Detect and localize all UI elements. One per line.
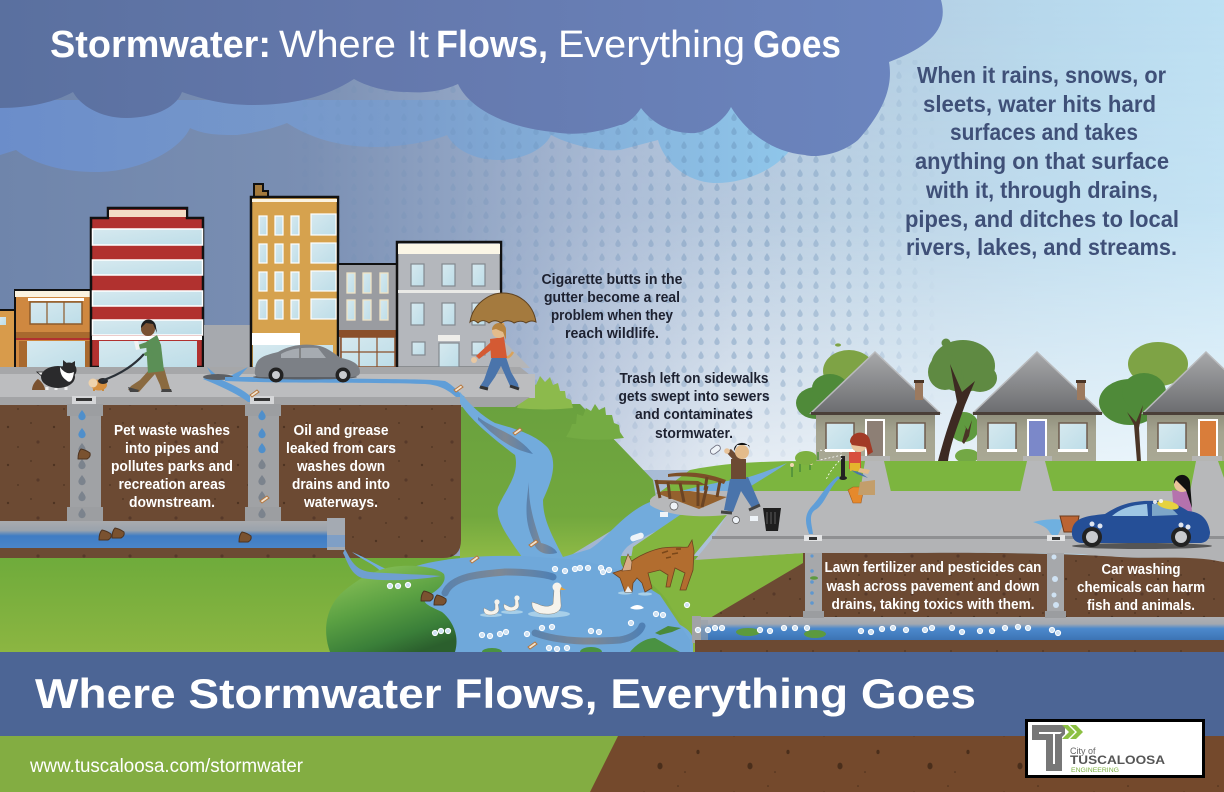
title: Where It bbox=[279, 24, 429, 66]
title: Everything bbox=[558, 24, 745, 66]
text: pet waste bbox=[111, 423, 233, 511]
logo: City of bbox=[1070, 746, 1096, 756]
text: car washing bbox=[1077, 562, 1205, 614]
intro paragraph bbox=[905, 62, 1179, 260]
oil slicks bbox=[445, 417, 642, 641]
title: Flows, bbox=[436, 24, 548, 66]
runoff from car bbox=[1033, 519, 1065, 538]
runoff from lawn bbox=[806, 476, 840, 534]
icon: person with umbrella bbox=[470, 293, 536, 390]
intro paragraph: with it, through drains, bbox=[925, 177, 1158, 203]
logo: ENGINEERING bbox=[1071, 767, 1119, 774]
intro paragraph: anything on that surface bbox=[915, 148, 1169, 174]
icon: trash can bbox=[763, 508, 781, 531]
bubbles bbox=[387, 565, 1061, 652]
vertical pipe 2 bbox=[245, 396, 281, 534]
soil strip below pipe right bbox=[695, 640, 1224, 652]
horizontal pipe bbox=[0, 518, 345, 550]
text: trash: gets swept into sewers bbox=[618, 389, 770, 405]
house 2 bbox=[973, 352, 1102, 461]
logo mark bbox=[1032, 725, 1083, 771]
building: far left bbox=[0, 310, 18, 368]
buildings bbox=[0, 184, 530, 368]
website url: www.tuscaloosa.com/stormwater bbox=[29, 756, 304, 777]
text: cigarette butts: gutter become a real bbox=[544, 290, 680, 306]
sidewalk bbox=[0, 367, 535, 407]
soil: right bbox=[695, 553, 1224, 652]
logo bbox=[1025, 719, 1205, 778]
title: Goes bbox=[753, 24, 841, 66]
building: red tall bbox=[91, 208, 203, 367]
text: pet waste: recreation areas bbox=[118, 477, 226, 493]
tree: right bbox=[1099, 342, 1188, 462]
street drains right bbox=[804, 535, 1065, 541]
text: lawn fertilizer bbox=[824, 560, 1042, 613]
house 1 bbox=[811, 352, 940, 461]
icon: blue car bbox=[1072, 499, 1212, 549]
flowers bbox=[790, 451, 818, 477]
storm pipe: right bbox=[692, 616, 1224, 643]
vertical pipe 1 bbox=[67, 396, 103, 534]
soil: left bbox=[0, 405, 461, 558]
text: car washing: chemicals can harm bbox=[1077, 580, 1205, 596]
icon: footbridge bbox=[654, 472, 727, 509]
text: cigarette butts: reach wildlife. bbox=[565, 326, 659, 342]
intro paragraph: rivers, lakes, and streams. bbox=[906, 234, 1177, 260]
text: trash: Trash left on sidewalks bbox=[620, 371, 768, 387]
icon: car grey bbox=[253, 345, 360, 382]
green bank: right of stream bbox=[482, 515, 803, 657]
text: pet waste: downstream. bbox=[129, 495, 215, 511]
text: cigarette butts: problem when they bbox=[551, 308, 673, 324]
text: pet waste: Pet waste washes bbox=[114, 423, 230, 439]
intro paragraph: sleets, water hits hard bbox=[923, 91, 1156, 117]
house 3 bbox=[1143, 352, 1224, 461]
building: grey middle bbox=[338, 264, 397, 368]
intro paragraph: pipes, and ditches to local bbox=[905, 206, 1179, 232]
banner text: Where Stormwater Flows, Everything Goes bbox=[35, 670, 976, 717]
green hill bbox=[460, 404, 657, 560]
icon: boy littering bbox=[709, 443, 760, 513]
building: light grey corner bbox=[397, 242, 501, 368]
bushes on hill bbox=[517, 376, 624, 440]
text: pet waste: into pipes and bbox=[125, 441, 219, 457]
title: Stormwater: bbox=[50, 24, 271, 66]
background trees and houses bbox=[796, 338, 1224, 463]
text: trash: stormwater. bbox=[655, 426, 733, 442]
text: lawn fertilizer: Lawn fertilizer and pesticides can bbox=[824, 560, 1042, 576]
building: tan tall bbox=[251, 184, 338, 368]
text: car washing: Car washing bbox=[1102, 562, 1180, 578]
icon: person walking dog bbox=[101, 319, 172, 392]
text: pet waste: pollutes parks and bbox=[111, 459, 233, 475]
rain drops bbox=[450, 60, 918, 457]
intro paragraph: When it rains, snows, or bbox=[917, 62, 1166, 88]
lower green ground bbox=[0, 556, 720, 656]
icon: ducks bbox=[480, 582, 570, 618]
trash in stream bbox=[250, 385, 758, 649]
text: lawn fertilizer: drains, taking toxics with them. bbox=[832, 597, 1034, 613]
icon: girl washing blue car bbox=[1172, 475, 1192, 512]
grey slope behind walker bbox=[500, 337, 530, 368]
lawn and paths bbox=[660, 461, 1224, 492]
street and driveway right bbox=[650, 491, 1224, 562]
tree: small behind bbox=[949, 412, 979, 463]
drain pipes: right bbox=[803, 553, 1066, 618]
banner bbox=[0, 652, 1224, 736]
icon: bucket bbox=[1060, 516, 1079, 532]
tree: large centre bbox=[928, 338, 997, 461]
icon: deer bbox=[613, 540, 694, 596]
icon: dog and waste bbox=[32, 360, 76, 390]
text: oil and grease bbox=[286, 423, 396, 511]
middle cloud layer bbox=[0, 100, 790, 183]
sky background bbox=[0, 0, 1224, 560]
intro paragraph: surfaces and takes bbox=[950, 119, 1138, 145]
logo: TUSCALOOSA bbox=[1070, 755, 1165, 767]
text: oil and grease: drains and into bbox=[292, 477, 390, 493]
text: oil and grease: waterways. bbox=[303, 495, 378, 511]
text: oil and grease: Oil and grease bbox=[294, 423, 388, 439]
building: grey connector bbox=[204, 325, 250, 368]
text: lawn fertilizer: wash across pavement and down bbox=[826, 579, 1040, 595]
storm cloud bbox=[0, 0, 943, 156]
text: car washing: fish and animals. bbox=[1087, 598, 1195, 614]
drain pipes and main pipe: left bbox=[0, 396, 345, 550]
building: orange low bbox=[15, 290, 92, 368]
text: oil and grease: washes down bbox=[296, 459, 385, 475]
street runoff bbox=[203, 367, 465, 402]
large green bush bbox=[326, 566, 457, 652]
tree: behind first house bbox=[796, 343, 875, 419]
text: cigarette butts: Cigarette butts in the bbox=[542, 272, 682, 288]
ground strip: bottom bbox=[0, 735, 1224, 792]
icon: small dog bbox=[88, 378, 108, 391]
icon: girl with sprinkler bbox=[818, 433, 875, 503]
text: oil and grease: leaked from cars bbox=[286, 441, 396, 457]
text: trash bbox=[618, 371, 770, 442]
text: cigarette butts bbox=[542, 272, 682, 342]
title bbox=[50, 24, 841, 66]
pipe outflow over bush bbox=[343, 549, 441, 580]
text: trash: and contaminates bbox=[635, 407, 753, 423]
stream and pond bbox=[345, 392, 787, 652]
